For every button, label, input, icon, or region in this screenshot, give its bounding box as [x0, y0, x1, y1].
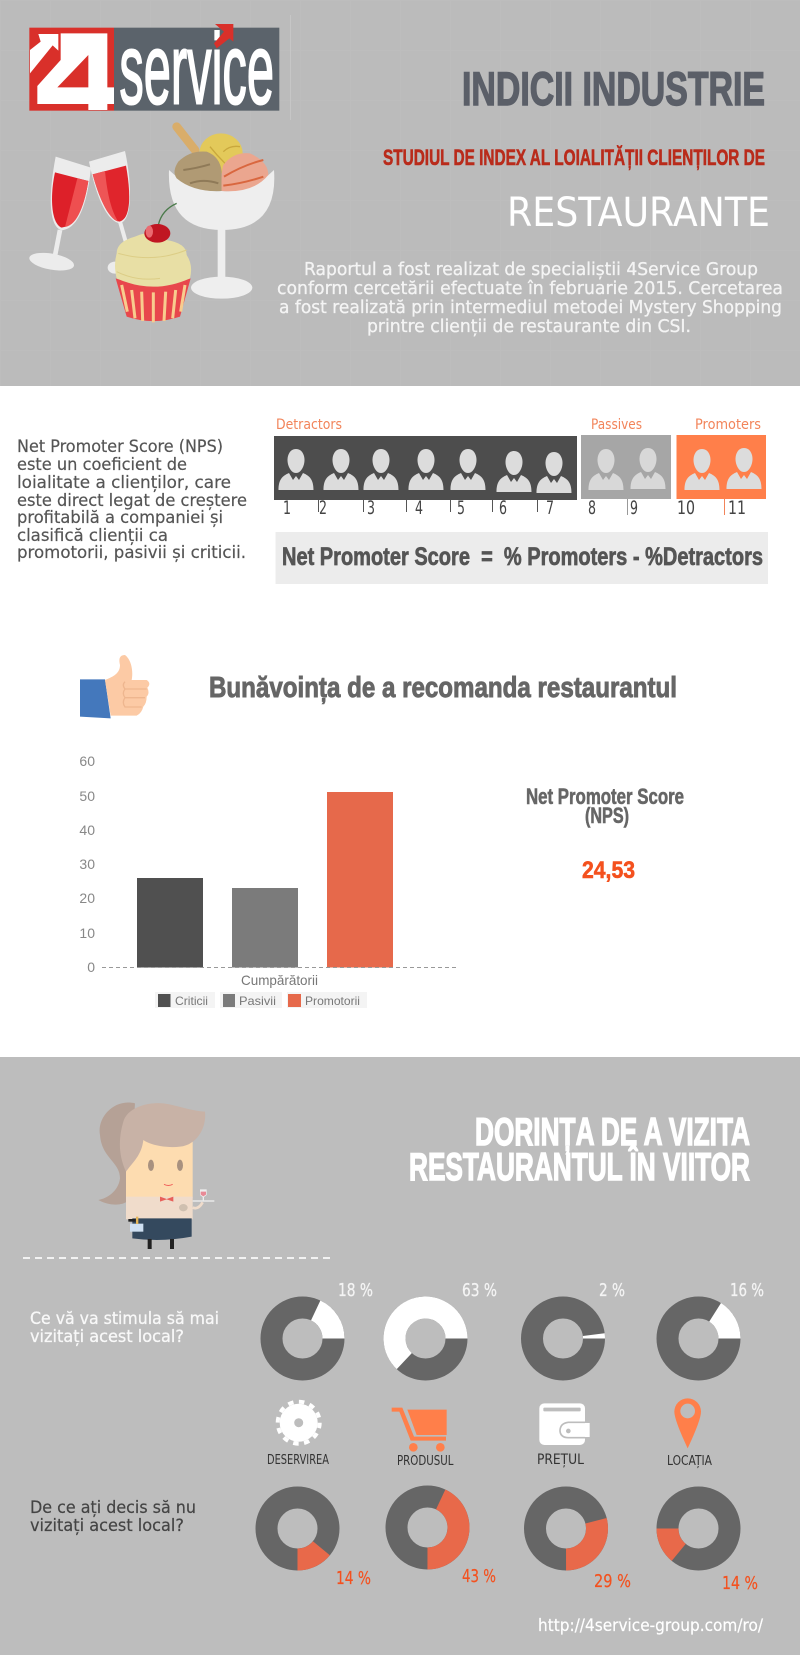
heading: willingness to recommend: Bunăvoința de a recomanda restaurantul	[209, 672, 677, 704]
panel: promoters people	[676, 435, 766, 499]
icon: wallet	[539, 1403, 590, 1445]
text block: NPS definition: promotorii, pasivii și criticii.	[17, 543, 246, 563]
bar chart: NPS groups: 20	[79, 890, 95, 906]
NPS scale labels	[276, 417, 761, 433]
donut: 2% price: 2 %	[599, 1280, 625, 1301]
text block: NPS definition	[17, 437, 247, 563]
text block: NPS definition: Net Promoter Score (NPS)	[17, 437, 223, 457]
logo: 4Service	[29, 13, 279, 125]
bar chart: NPS groups: 50	[79, 788, 95, 804]
text block: report description	[277, 259, 783, 337]
donut: 2% price	[528, 1280, 625, 1373]
NPS scale numbers and ticks: 11	[728, 497, 746, 519]
chart legend: Pasivii	[239, 994, 276, 1008]
donut: 43% product	[386, 1486, 496, 1587]
icon: gear	[278, 1402, 320, 1444]
NPS scale numbers and ticks: 6	[499, 497, 507, 519]
label: Pretul: PREȚUL	[537, 1452, 584, 1468]
panel: white section	[0, 386, 800, 1057]
link: website: http://4service-group.com/ro/	[538, 1616, 763, 1636]
text block: report description: a fost realizată prin intermediul metodei Mystery Shopping	[279, 297, 782, 318]
NPS scale numbers and ticks: 10	[677, 497, 695, 519]
NPS scale numbers and ticks: 5	[457, 497, 465, 519]
callout: NPS value	[526, 784, 684, 884]
chart legend: Criticii	[175, 994, 208, 1008]
chart legend: Promotorii	[305, 994, 360, 1008]
panel: passives people	[581, 435, 671, 499]
NPS scale labels: Passives	[591, 417, 642, 433]
bar chart: NPS groups: 0	[87, 959, 95, 975]
chart legend	[155, 992, 367, 1008]
text block: NPS definition: este direct legat de creștere	[17, 491, 247, 511]
bar chart: NPS groups: 60	[79, 753, 95, 769]
text block: question 1	[30, 1309, 219, 1347]
text block: report description: printre clienții de restaurante din CSI.	[367, 316, 691, 337]
icon: thumbs up	[80, 655, 149, 718]
label: Locatia: LOCAȚIA	[667, 1454, 712, 1469]
logo: 4Service: service	[119, 13, 274, 125]
donut: 63% product: 63 %	[462, 1280, 497, 1301]
heading: desire to visit	[409, 1111, 750, 1189]
donut: 18% service	[261, 1280, 373, 1380]
illustration: wine glasses, ice cream and cupcake	[28, 127, 274, 322]
label: Deservirea: DESERVIREA	[267, 1453, 329, 1468]
panel: NPS formula	[276, 532, 768, 584]
panel: future visit	[0, 1057, 800, 1655]
text block: NPS definition: este un coeficient de	[17, 455, 187, 475]
text block: question 2: vizitați acest local?	[30, 1516, 184, 1536]
callout: NPS value: 24,53	[582, 857, 635, 884]
NPS scale numbers and ticks: 4	[415, 497, 423, 519]
donut: 14% service: 14 %	[336, 1568, 371, 1589]
text block: question 1: vizitați acest local?	[30, 1327, 184, 1347]
donut: 43% product: 43 %	[462, 1566, 496, 1587]
donut: 14% service	[254, 1485, 371, 1589]
NPS scale numbers and ticks: 7	[546, 497, 554, 519]
text block: question 2	[30, 1498, 196, 1536]
donut: 63% product	[382, 1280, 497, 1382]
bar: Pasivii 23	[232, 888, 298, 968]
donut: 18% service: 18 %	[338, 1280, 373, 1301]
bar chart: NPS groups: 10	[79, 925, 95, 941]
callout: NPS value: Net Promoter Score	[526, 784, 684, 809]
NPS scale numbers and ticks: 8	[588, 497, 596, 519]
donut: 29% price: 29 %	[594, 1571, 631, 1592]
bar chart: NPS groups: Cumpărătorii	[241, 972, 318, 988]
panel: header	[0, 0, 800, 386]
text block: NPS definition: loialitate a clienților, care	[17, 473, 231, 493]
donut: 29% price	[528, 1491, 631, 1592]
bar: Criticii 26	[137, 878, 203, 968]
panel: detractors people	[274, 436, 577, 500]
NPS scale numbers and ticks	[283, 497, 746, 519]
subtitle: Restaurante: RESTAURANTE	[507, 190, 770, 236]
callout: NPS value: (NPS)	[585, 803, 629, 828]
bar chart: NPS groups: 40	[79, 822, 95, 838]
NPS scale numbers and ticks: 1	[283, 497, 291, 519]
illustration: waitress	[98, 1103, 214, 1249]
donut: 16% location	[656, 1280, 764, 1381]
donut: 16% location: 16 %	[730, 1280, 764, 1301]
text block: report description: Raportul a fost realizat de specialiștii 4Service Group	[304, 259, 758, 280]
bar chart: NPS groups	[79, 753, 458, 1008]
text block: question 2: De ce ați decis să nu	[30, 1498, 196, 1518]
icon: location pin	[674, 1398, 701, 1448]
NPS scale numbers and ticks: 2	[319, 497, 327, 519]
NPS scale labels: Detractors	[276, 417, 342, 433]
NPS scale numbers and ticks: 3	[367, 497, 375, 519]
donut: 14% location	[655, 1485, 758, 1594]
text block: NPS definition: clasifică clienții ca	[17, 526, 168, 546]
text block: NPS definition: profitabilă a companiei și	[17, 508, 223, 528]
label: Produsul: PRODUSUL	[397, 1454, 454, 1469]
text block: question 1: Ce vă va stimula să mai	[30, 1309, 219, 1329]
text block: report description: conform cercetării efectuate în februarie 2015. Cercetarea	[277, 278, 783, 299]
bar chart: NPS groups: 30	[79, 856, 95, 872]
NPS scale numbers and ticks: 9	[630, 497, 638, 519]
icon: shopping cart	[392, 1408, 447, 1452]
bar: Promotorii 51	[327, 792, 393, 968]
NPS scale labels: Promoters	[695, 417, 761, 433]
donut: 14% location: 14 %	[722, 1573, 758, 1594]
